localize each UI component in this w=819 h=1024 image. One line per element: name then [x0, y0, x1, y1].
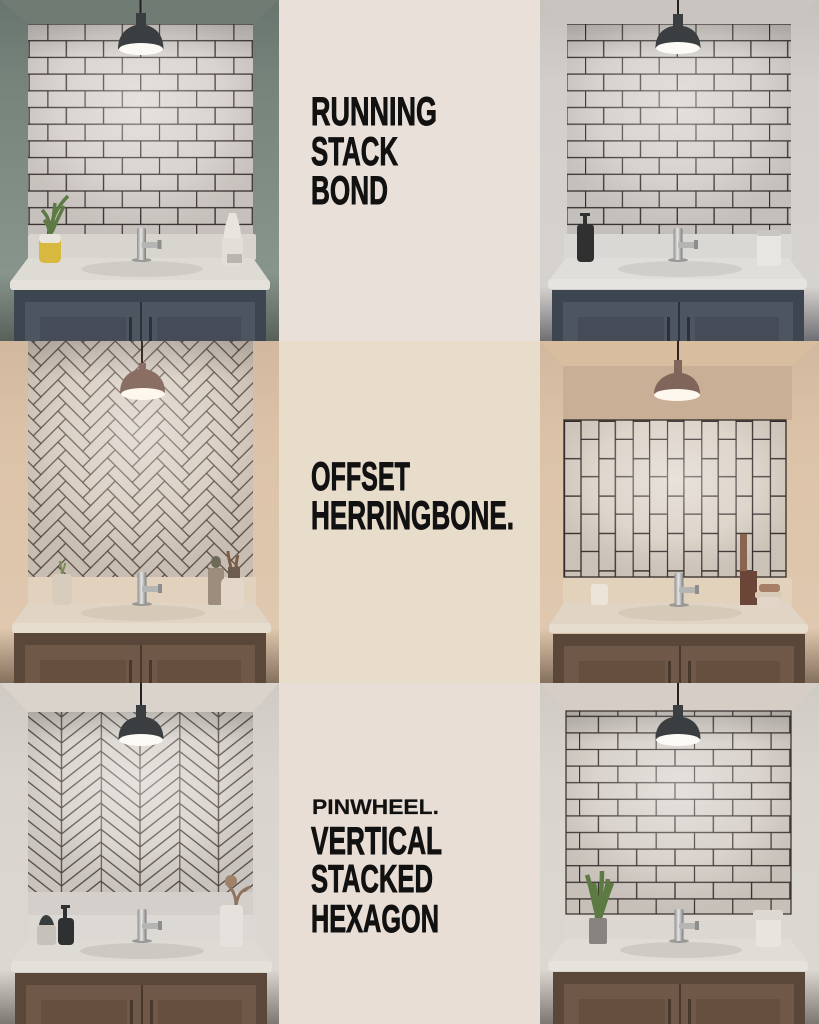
stacked cups [753, 910, 783, 947]
pendant lamp [656, 683, 700, 746]
panel: running bond, sage room [0, 0, 279, 342]
panel: running bond, warm light room [540, 683, 819, 1024]
backsplash [28, 577, 256, 605]
panel: running bond, light gray room [540, 0, 819, 342]
panel: herringbone, peach room [0, 341, 279, 685]
brown block with brush [740, 534, 757, 605]
small jar [37, 915, 56, 945]
stacked bowls [755, 584, 782, 610]
heading line: VERTICAL [311, 820, 442, 863]
backsplash [564, 915, 792, 941]
running bond tile wall [566, 711, 791, 914]
backsplash [564, 234, 792, 260]
panel: offset herringbone label [279, 341, 540, 683]
canister [757, 230, 781, 266]
bottle [222, 213, 243, 266]
vanity counter [548, 939, 808, 971]
panel: running stack bond label [279, 0, 540, 341]
heading line: STACKED [311, 858, 433, 901]
vanity counter [12, 603, 271, 633]
heading line: HEXAGON [311, 898, 439, 941]
vase with sprout [52, 561, 72, 605]
vanity counter [10, 258, 270, 290]
panel: pinwheel, vertical stacked hexagon label [279, 683, 540, 1024]
running bond tile wall [567, 24, 791, 234]
faucet [132, 909, 162, 943]
pendant lamp [118, 683, 164, 746]
backsplash [28, 234, 256, 260]
backsplash [28, 915, 256, 941]
tall taupe jar with plant [208, 556, 224, 605]
pendant lamp [118, 0, 164, 55]
faucet [669, 573, 699, 607]
white pot with dried plant [221, 551, 244, 610]
faucet [668, 228, 698, 262]
cup [591, 584, 608, 605]
plant in yellow vase [39, 196, 68, 263]
cabinet [553, 972, 805, 1024]
soap dispenser [577, 213, 594, 262]
pendant lamp [656, 0, 700, 54]
pendant lamp [654, 341, 700, 401]
cabinet [553, 634, 805, 686]
heading line: HERRINGBONE. [311, 494, 514, 538]
vanity counter [11, 940, 272, 972]
backsplash [563, 578, 792, 606]
herringbone tile wall [28, 341, 253, 577]
faucet [132, 228, 162, 262]
soap dispenser [58, 905, 74, 945]
heading line: OFFSET [311, 455, 410, 499]
cabinet [14, 633, 266, 685]
running bond tile wall [28, 24, 253, 234]
lower plain wall [28, 892, 253, 916]
faucet [669, 909, 699, 943]
panel: vertical stack, peach room [540, 341, 819, 686]
pendant lamp [120, 341, 165, 400]
vase with dried flowers [220, 875, 250, 947]
plant in gray pot [587, 871, 612, 944]
chevron tile wall [28, 712, 253, 892]
faucet [132, 572, 162, 606]
heading line: RUNNING [311, 90, 437, 134]
cabinet [14, 290, 266, 342]
subheading line: PINWHEEL. [312, 796, 439, 819]
panel: chevron, light room [0, 683, 279, 1024]
cabinet [15, 973, 267, 1024]
vertical stacked tile wall [564, 420, 786, 577]
upper wall [563, 366, 792, 420]
vanity counter [549, 603, 808, 633]
vanity counter [548, 258, 807, 289]
cabinet [552, 290, 804, 342]
heading line: BOND [311, 169, 388, 213]
heading line: STACK [311, 130, 398, 174]
